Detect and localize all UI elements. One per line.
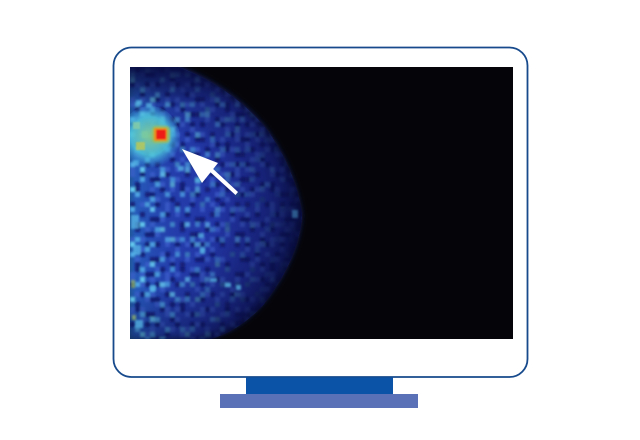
scan image [120,67,513,339]
hot spot [130,106,180,167]
monitor base [220,394,418,408]
monitor neck [246,378,393,394]
screen background [130,67,513,339]
icon: arrow pointing to hot spot [182,149,238,195]
scan tissue area [130,67,305,339]
infographic: monitor displaying scan [112,46,528,408]
monitor frame [114,48,528,377]
